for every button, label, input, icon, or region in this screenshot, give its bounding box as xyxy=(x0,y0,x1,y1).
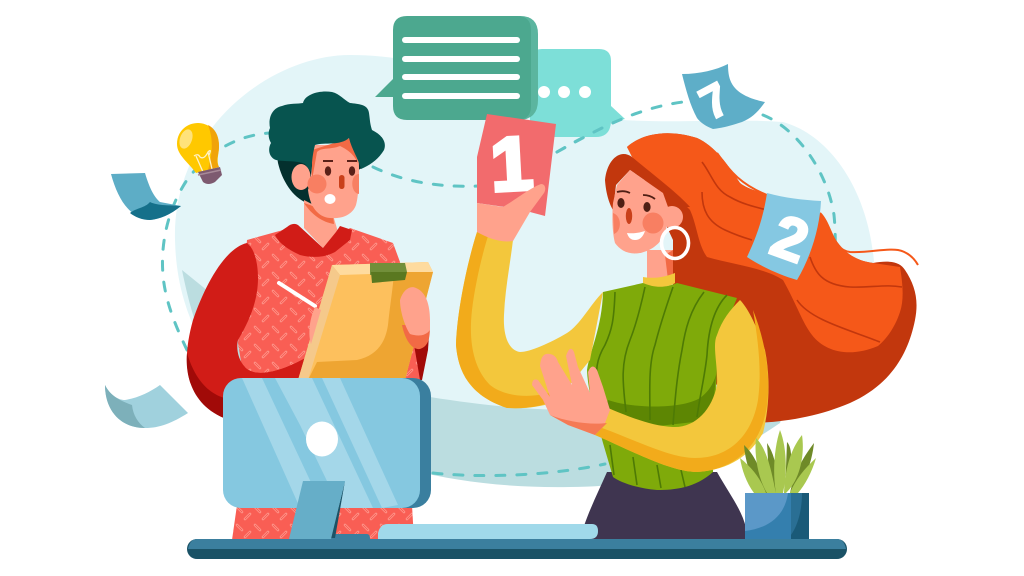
paper: left lower xyxy=(105,385,188,428)
hood collar xyxy=(275,224,352,257)
pen xyxy=(279,283,315,306)
hand holding card xyxy=(477,184,545,241)
hand on pen xyxy=(309,307,321,344)
dashed path xyxy=(162,102,835,476)
stand xyxy=(289,481,370,539)
hair back xyxy=(627,133,917,423)
collar xyxy=(643,273,675,287)
pot xyxy=(745,493,809,540)
monitor logo xyxy=(306,422,338,456)
keyboard xyxy=(378,524,598,539)
desk xyxy=(187,539,847,559)
neck xyxy=(304,200,338,248)
card: number 1: 1 xyxy=(488,121,535,208)
person: man xyxy=(187,91,433,540)
hair xyxy=(269,91,385,172)
face xyxy=(612,170,668,253)
far arm shadow xyxy=(393,300,430,380)
front hair xyxy=(605,154,690,210)
front arm xyxy=(595,300,769,472)
plant xyxy=(740,430,816,540)
hair wisps xyxy=(717,153,918,265)
clipboard xyxy=(298,262,433,380)
hand on clipboard xyxy=(400,287,430,349)
paper: number 2: 2 xyxy=(763,202,817,276)
lower sweater xyxy=(232,505,414,540)
background blob xyxy=(175,55,874,487)
face xyxy=(308,138,359,218)
monitor xyxy=(223,378,431,539)
hair light xyxy=(627,133,903,352)
paper: number 2 xyxy=(747,193,821,280)
dash over bubble tail xyxy=(557,119,622,152)
raised arm xyxy=(456,232,603,408)
earring xyxy=(662,228,688,258)
hair strands xyxy=(702,162,902,342)
skirt xyxy=(580,472,746,540)
sweater ribs xyxy=(597,287,727,488)
back hair xyxy=(276,150,362,205)
ear xyxy=(661,206,683,228)
green sweater xyxy=(587,283,737,490)
sleeve xyxy=(187,243,305,418)
waving hand xyxy=(532,349,610,435)
paper: left upper xyxy=(111,173,181,220)
speech bubble: dots xyxy=(530,49,625,137)
icon: light bulb xyxy=(177,123,222,184)
card: number 1 xyxy=(477,114,556,216)
ear xyxy=(292,164,310,190)
sweater torso xyxy=(238,228,420,380)
paper: number 7: 7 xyxy=(691,72,738,130)
person: woman xyxy=(456,133,918,540)
speech bubble: text lines xyxy=(375,16,538,120)
neck xyxy=(647,250,673,282)
paper: number 7 xyxy=(682,64,765,130)
